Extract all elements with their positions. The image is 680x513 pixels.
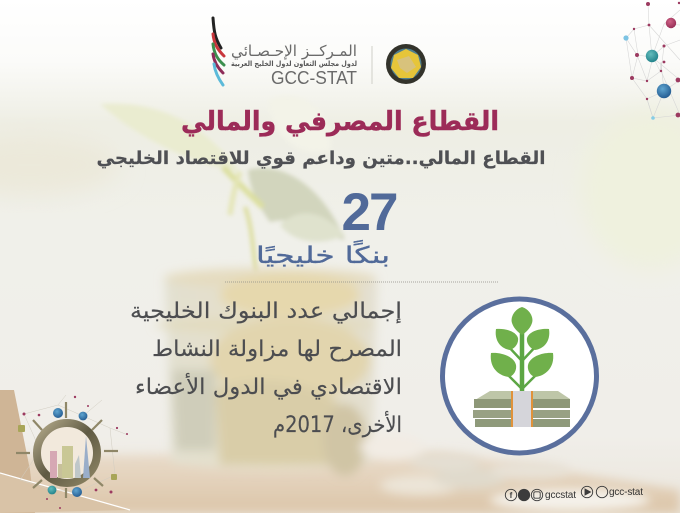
logo ribbon bbox=[213, 18, 224, 85]
dotted divider bbox=[225, 281, 498, 283]
plant leaves bbox=[491, 307, 553, 377]
network decoration top right bbox=[623, 2, 680, 120]
compass spokes bbox=[16, 402, 118, 498]
logo: GCC-STAT bbox=[213, 18, 426, 88]
icon: plant growing from banknotes bbox=[442, 299, 596, 453]
logo wordmark: GCC-STAT bbox=[271, 68, 357, 88]
logo wordmark bbox=[231, 42, 357, 88]
logo wordmark: المـركــز الإحـصـائي bbox=[231, 42, 357, 61]
compass skyline emblem bbox=[0, 390, 130, 513]
title: القطاع المصرفي والمالي bbox=[181, 107, 499, 137]
handle: gcc-stat: gcc-stat bbox=[609, 487, 643, 498]
description text: إجمالي عدد البنوك الخليجية bbox=[130, 299, 402, 324]
description text: المصرح لها مزاولة النشاط bbox=[152, 337, 402, 362]
social media handles: f bbox=[510, 491, 513, 500]
subtitle: القطاع المالي..متين وداعم قوي للاقتصاد الخليجي bbox=[96, 148, 546, 169]
label: 27 GCC banks: بنكًا خليجيًا bbox=[256, 240, 390, 269]
description text: الأخرى، 2017م bbox=[273, 411, 402, 438]
logo wordmark: لدول مجلس التعاون لدول الخليج العربية bbox=[231, 60, 357, 68]
GCC emblem bbox=[386, 44, 426, 84]
description text: الاقتصادي في الدول الأعضاء bbox=[135, 373, 402, 400]
description text bbox=[130, 299, 402, 438]
plant stem and branches bbox=[503, 320, 541, 394]
banknote stack bbox=[473, 391, 570, 427]
skyline bbox=[50, 436, 90, 478]
social media handles bbox=[505, 486, 643, 501]
social icons bbox=[505, 486, 608, 501]
big number 27: 27 bbox=[342, 183, 397, 242]
handle: gccstat: gccstat bbox=[545, 490, 576, 501]
